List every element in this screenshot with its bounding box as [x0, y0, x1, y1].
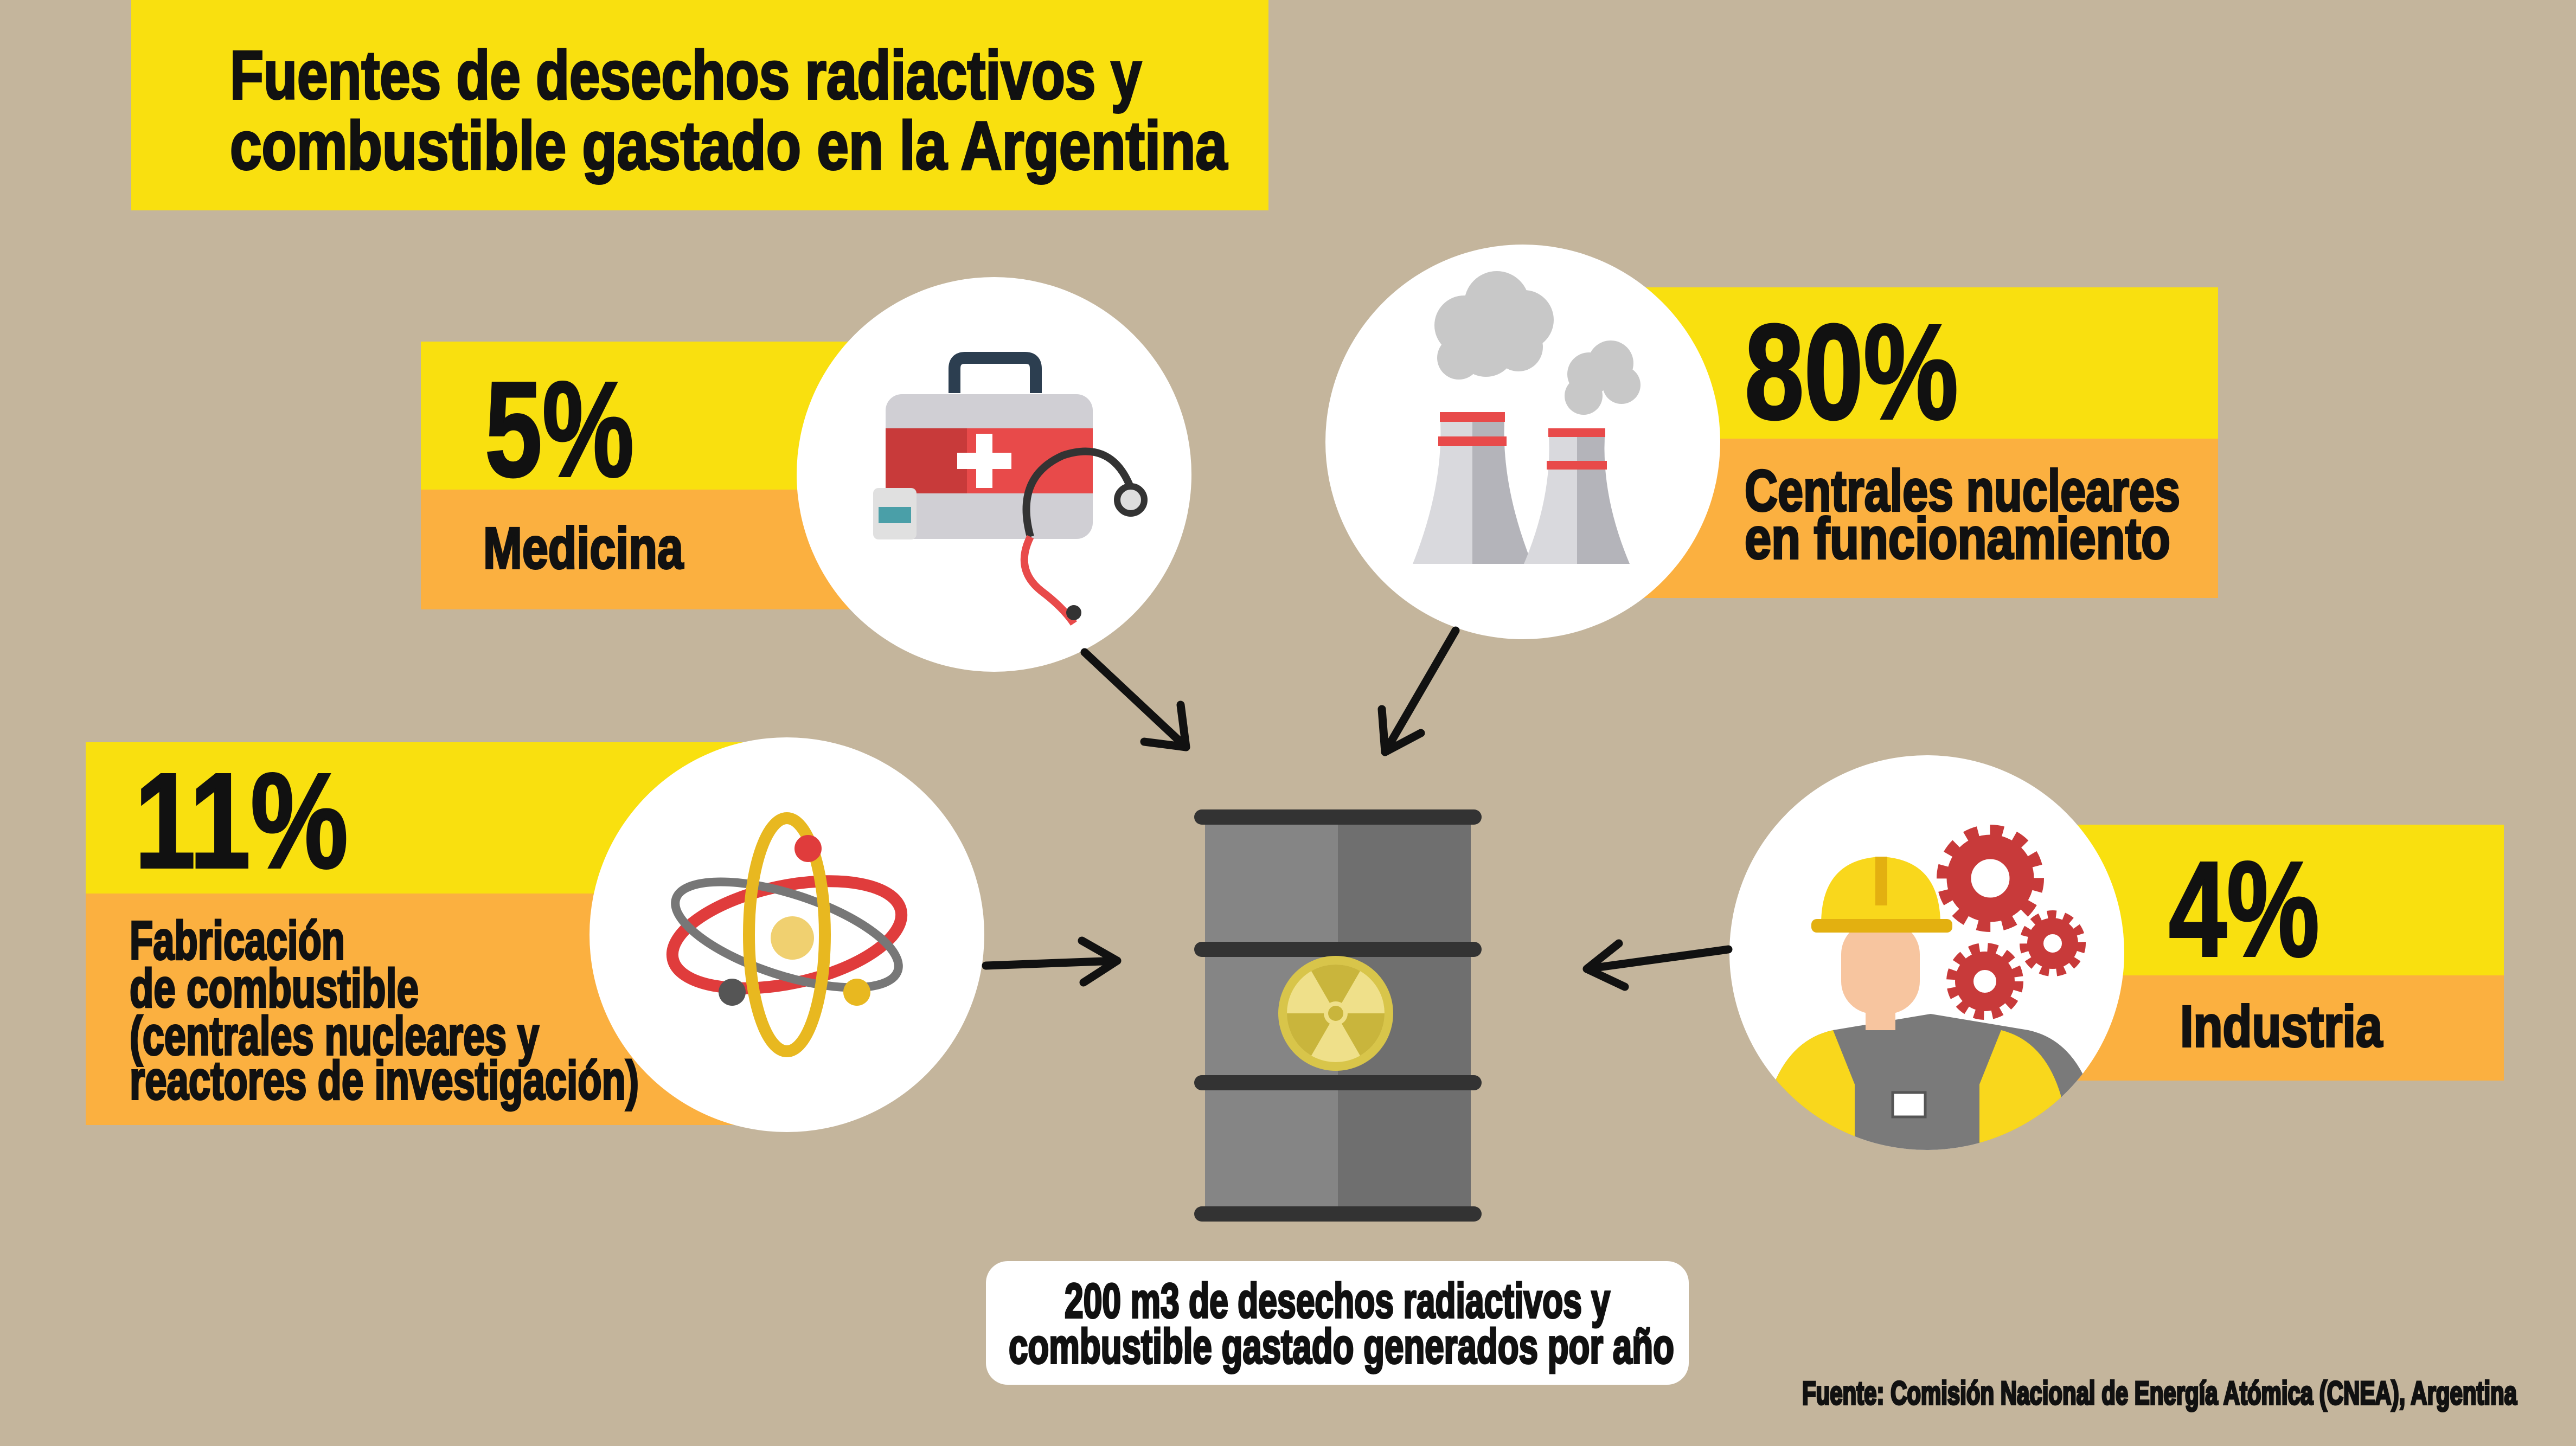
- title: combustible gastado en la Argentina: [230, 107, 1228, 184]
- panel: fabricacion: de combustible: [130, 958, 419, 1019]
- title: Fuentes de desechos radiactivos y: [230, 37, 1142, 113]
- icon: atom: [589, 737, 984, 1132]
- panel: fabricacion: 11%: [134, 745, 348, 896]
- barrel: [1194, 809, 1482, 1222]
- panel: medicina: Medicina: [483, 515, 684, 581]
- panel: industria: Industria: [2180, 993, 2383, 1059]
- panel: fabricacion: (centrales nucleares y: [130, 1006, 539, 1066]
- caption: 200 m3 de desechos radiactivos y: [1065, 1274, 1610, 1328]
- panel: industria: 4%: [2169, 833, 2319, 985]
- icon: radiation: [1278, 956, 1393, 1071]
- caption: [986, 1261, 1689, 1385]
- panel: centrales: en funcionamiento: [1745, 505, 2170, 571]
- icon: medical kit: [797, 277, 1191, 672]
- title: [131, 0, 1268, 210]
- icon: worker with gears: [1729, 755, 2124, 1193]
- panel: medicina: 5%: [485, 354, 634, 505]
- caption: combustible gastado generados por año: [1009, 1320, 1674, 1374]
- panel: centrales: Centrales nucleares: [1745, 458, 2180, 523]
- icon: cooling towers: [1325, 245, 1720, 639]
- panel: fabricacion: Fabricación: [130, 910, 345, 971]
- panel: medicina: [421, 342, 909, 609]
- panel: industria: [2070, 825, 2504, 1081]
- panel: fabricacion: [86, 742, 756, 1125]
- panel: centrales: 80%: [1745, 296, 1958, 447]
- panel: centrales: [1643, 287, 2218, 598]
- panel: fabricacion: reactores de investigación): [130, 1050, 639, 1111]
- arrows: [986, 631, 1728, 987]
